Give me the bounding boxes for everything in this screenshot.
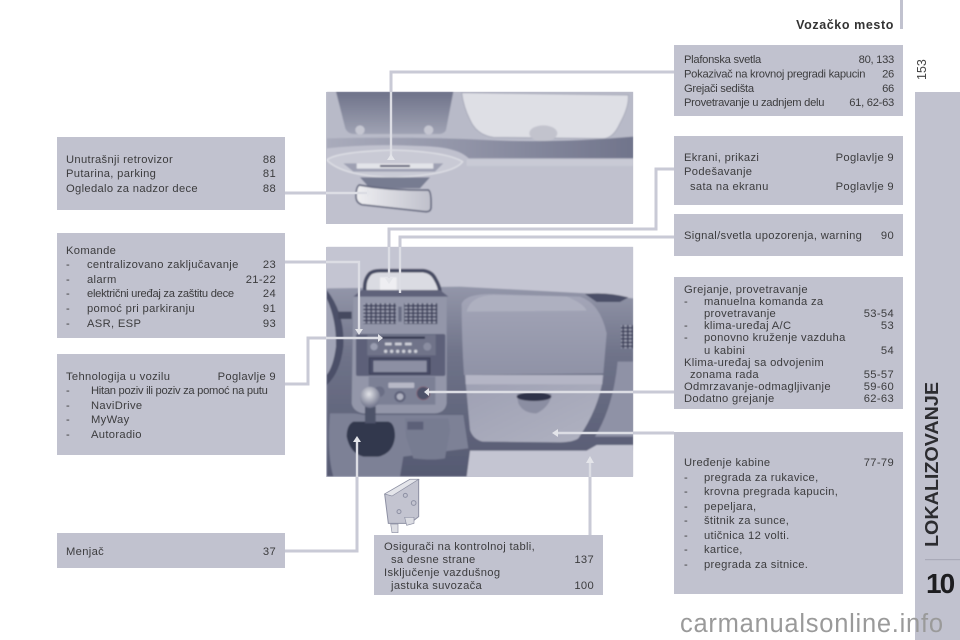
panel: heating and ventilation: Grejanje, provetravanje <box>684 284 808 296</box>
panel: cabin fittings: - <box>684 544 688 556</box>
panel: controls: 91 <box>263 303 276 315</box>
panel: cabin fittings: 77-79 <box>864 457 894 469</box>
arrow: heating leader <box>424 388 674 396</box>
panel: cabin fittings: - <box>684 515 688 527</box>
arrow: ceiling light leader <box>387 72 674 160</box>
panel: cabin fittings: - <box>684 486 688 498</box>
panel: cabin fittings <box>674 432 903 594</box>
panel: controls: Komande <box>66 245 116 257</box>
panel: gearbox <box>57 533 285 568</box>
panel: heating and ventilation: Dodatno grejanje <box>684 393 774 405</box>
panel: rear-view mirror: 88 <box>263 154 276 166</box>
panel: controls: 24 <box>263 288 276 300</box>
panel: controls: alarm <box>87 274 117 286</box>
panel: controls: 93 <box>263 318 276 330</box>
panel: heating and ventilation: - <box>684 296 688 308</box>
panel: controls <box>57 233 285 338</box>
panel: controls: pomoć pri parkiranju <box>87 303 195 315</box>
panel: heating and ventilation: manuelna komanda za <box>704 296 824 308</box>
arrow: vehicle technology leader <box>285 334 383 384</box>
arrow: gearbox leader <box>285 436 361 551</box>
panel: screens: Ekrani, prikazi <box>684 152 759 164</box>
panel: rear-view mirror: 81 <box>263 168 276 180</box>
arrow: controls leader <box>285 262 363 335</box>
panel: cabin fittings: pepeljara, <box>704 501 756 513</box>
panel: fuses and airbag <box>374 535 603 595</box>
watermark: carmanualsonline.info <box>680 610 943 638</box>
sidebar: chapter tab: LOKALIZOVANJE <box>922 382 942 547</box>
sidebar: chapter tab: 10 <box>926 568 955 599</box>
panel: cabin fittings: pregrada za rukavice, <box>704 472 819 484</box>
panel: ceiling equipment: Plafonska svetla <box>684 54 762 66</box>
panel: controls: 21-22 <box>246 274 276 286</box>
panel: controls: ASR, ESP <box>87 318 141 330</box>
panel: rear-view mirror: Unutrašnji retrovizor <box>66 154 173 166</box>
panel: heating and ventilation: klima-uređaj A/C <box>704 320 791 332</box>
panel: vehicle technology: Tehnologija u vozilu <box>66 371 170 383</box>
panel: ceiling equipment: Grejači sedišta <box>684 83 755 95</box>
panel: vehicle technology: - <box>66 429 70 441</box>
panel: heating and ventilation: - <box>684 332 688 344</box>
panel: heating and ventilation: ponovno kruženje vazduha <box>704 332 846 344</box>
panel: controls: - <box>66 303 70 315</box>
panel: screens: Poglavlje 9 <box>836 181 894 193</box>
panel: cabin fittings: - <box>684 559 688 571</box>
panel: cabin fittings: štitnik za sunce, <box>704 515 789 527</box>
panel: screens <box>674 136 903 205</box>
illustration: dashboard <box>326 247 633 477</box>
panel: ceiling equipment <box>674 45 903 116</box>
panel: heating and ventilation: 54 <box>881 345 894 357</box>
panel: heating and ventilation: Odmrzavanje-odmagljivanje <box>684 381 831 393</box>
panel: heating and ventilation <box>674 277 903 409</box>
panel: rear-view mirror: Putarina, parking <box>66 168 156 180</box>
arrow: fuses leader <box>586 456 594 535</box>
panel: controls: - <box>66 288 70 300</box>
panel: controls: - <box>66 259 70 271</box>
page number: 153 <box>915 59 929 80</box>
panel: fuses and airbag: Isključenje vazdušnog <box>384 567 500 579</box>
panel: cabin fittings: utičnica 12 volti. <box>704 530 790 542</box>
panel: heating and ventilation: 55-57 <box>864 369 894 381</box>
panel: gearbox: 37 <box>263 546 276 558</box>
panel: vehicle technology: Hitan poziv ili poziv za pomoć na putu <box>91 385 268 397</box>
panel: fuses and airbag: 137 <box>574 554 594 566</box>
panel: warning lights: 90 <box>881 230 894 242</box>
panel: ceiling equipment: 26 <box>882 68 894 80</box>
panel: controls: - <box>66 318 70 330</box>
panel: heating and ventilation: 62-63 <box>864 393 894 405</box>
panel: screens: Poglavlje 9 <box>836 152 894 164</box>
panel: warning lights <box>674 214 903 256</box>
arrow: warning lights leader <box>400 237 674 293</box>
panel: controls: 23 <box>263 259 276 271</box>
panel: cabin fittings: pregrada za sitnice. <box>704 559 808 571</box>
header: section title: Vozačko mesto <box>796 18 894 32</box>
panel: ceiling equipment: Provetravanje u zadnjem delu <box>684 97 824 109</box>
panel: warning lights: Signal/svetla upozorenja, warning <box>684 230 862 242</box>
panel: controls: električni uređaj za zaštitu dece <box>87 288 234 300</box>
panel: fuses and airbag: Osigurači na kontrolnoj tabli, <box>384 541 535 553</box>
panel: fuses and airbag: jastuka suvozača <box>390 580 483 592</box>
panel: rear-view mirror: Ogledalo za nadzor dece <box>66 183 198 195</box>
panel: cabin fittings: - <box>684 472 688 484</box>
panel: ceiling equipment: 66 <box>882 83 894 95</box>
panel: heating and ventilation: u kabini <box>704 345 745 357</box>
icon: fuse <box>385 479 419 533</box>
panel: heating and ventilation: 59-60 <box>864 381 894 393</box>
panel: heating and ventilation: 53-54 <box>864 308 894 320</box>
panel: vehicle technology: - <box>66 414 70 426</box>
panel: heating and ventilation: 53 <box>881 320 894 332</box>
panel: cabin fittings: krovna pregrada kapucin, <box>704 486 838 498</box>
panel: screens: sata na ekranu <box>690 181 769 193</box>
panel: heating and ventilation: Klima-uređaj sa odvojenim <box>684 357 824 369</box>
panel: controls: - <box>66 274 70 286</box>
panel: fuses and airbag: sa desne strane <box>391 554 476 566</box>
panel: gearbox: Menjač <box>66 546 104 558</box>
panel: vehicle technology: Poglavlje 9 <box>218 371 276 383</box>
panel: cabin fittings: Uređenje kabine <box>684 457 770 469</box>
panel: cabin fittings: - <box>684 501 688 513</box>
panel: cabin fittings: - <box>684 530 688 542</box>
panel: fuses and airbag: 100 <box>574 580 594 592</box>
panel: cabin fittings: kartice, <box>704 544 743 556</box>
panel: controls: centralizovano zaključavanje <box>87 259 239 271</box>
panel: screens: Podešavanje <box>684 166 752 178</box>
panel: ceiling equipment: 61, 62-63 <box>849 97 894 109</box>
panel: rear-view mirror <box>57 137 285 210</box>
panel: vehicle technology: MyWay <box>91 414 130 426</box>
panel: ceiling equipment: 80, 133 <box>859 54 894 66</box>
panel: vehicle technology: - <box>66 385 70 397</box>
panel: vehicle technology: NaviDrive <box>91 400 142 412</box>
panel: rear-view mirror: 88 <box>263 183 276 195</box>
sidebar: chapter tab <box>915 92 960 640</box>
panel: vehicle technology: - <box>66 400 70 412</box>
panel: vehicle technology <box>57 354 285 455</box>
illustration: ceiling and rear-view mirror <box>326 92 633 224</box>
panel: vehicle technology: Autoradio <box>91 429 142 441</box>
panel: ceiling equipment: Pokazivač na krovnoj pregradi kapucin <box>684 68 865 80</box>
arrow: mirror leader <box>285 189 372 197</box>
panel: heating and ventilation: zonama rada <box>690 369 759 381</box>
panel: heating and ventilation: provetravanje <box>704 308 776 320</box>
arrow: cabin storage leader <box>552 429 674 437</box>
leader lines and arrows <box>285 72 674 551</box>
arrow: screens leader <box>385 169 674 284</box>
panel: heating and ventilation: - <box>684 320 688 332</box>
